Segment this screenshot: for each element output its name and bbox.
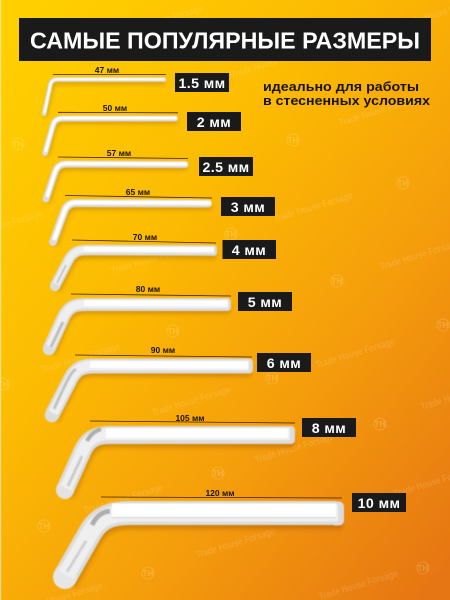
watermarks: Trade House Forsage <box>195 526 277 561</box>
dimension 65 mm: 65 мм <box>126 187 150 197</box>
watermarks: Trade House Forsage <box>230 46 312 81</box>
watermarks: TH <box>418 564 429 573</box>
dimension 47 mm: 47 мм <box>95 65 119 75</box>
watermarks: Trade House Forsage <box>83 482 165 517</box>
size label 10 mm: 10 мм <box>358 496 400 512</box>
dimension 90 mm: 90 мм <box>151 345 175 355</box>
hex key 8 mm <box>56 413 356 499</box>
dimension 80 mm: 80 мм <box>136 284 160 294</box>
size label 10 mm <box>352 493 406 512</box>
watermarks: TH <box>13 140 24 149</box>
size label 4 mm <box>222 240 276 259</box>
left edge highlight <box>0 0 1 600</box>
size label 4 mm: 4 мм <box>232 243 266 259</box>
hex key 6 mm <box>45 345 311 422</box>
watermarks: TH <box>213 469 224 478</box>
dimension 50 mm <box>58 103 178 113</box>
watermarks: TH <box>226 230 237 239</box>
key body <box>53 202 211 242</box>
watermarks: TH <box>375 420 386 429</box>
watermarks: Trade House Forsage <box>151 384 233 419</box>
size label 3 mm <box>221 197 275 216</box>
size label 2.5 mm: 2.5 мм <box>202 160 250 176</box>
watermarks: Trade House Forsage <box>110 242 192 277</box>
title banner: САМЫЕ ПОПУЛЯРНЫЕ РАЗМЕРЫ <box>30 28 420 54</box>
size label 8 mm: 8 мм <box>312 421 346 437</box>
dimension 50 mm: 50 мм <box>103 103 127 113</box>
watermarks: TH <box>39 522 50 531</box>
size label 6 mm: 6 мм <box>267 356 301 372</box>
watermarks: Trade House Forsage <box>40 341 122 376</box>
dimension 47 mm <box>53 65 166 75</box>
dimension 105 mm: 105 мм <box>175 413 205 423</box>
watermarks: Trade House Forsage <box>273 190 355 225</box>
hex key 4 mm <box>50 232 276 291</box>
key body <box>45 118 177 153</box>
size label 2 mm: 2 мм <box>197 115 231 131</box>
side note: в стесненных условиях <box>263 93 431 108</box>
watermarks: Trade House Forsage <box>315 336 397 371</box>
side note: идеально для работы <box>263 79 419 94</box>
key body <box>53 502 344 589</box>
watermarks: Trade House Forsage <box>254 431 336 466</box>
key body <box>56 426 295 499</box>
key body <box>44 79 165 114</box>
watermarks: Trade House Forsage <box>338 94 420 129</box>
watermarks: TH <box>398 179 409 188</box>
watermarks: TH <box>267 374 278 383</box>
dimension 57 mm <box>58 148 188 158</box>
dimension 120 mm: 120 мм <box>205 488 235 498</box>
size label 5 mm: 5 мм <box>248 295 282 311</box>
watermarks: TH <box>143 569 154 578</box>
watermarks: TH <box>332 277 343 286</box>
key body <box>45 358 253 422</box>
size label 2 mm <box>187 112 241 131</box>
key body <box>46 164 187 199</box>
size label 6 mm <box>257 353 311 372</box>
dimension 57 mm: 57 мм <box>107 148 131 158</box>
dimension 70 mm <box>72 232 216 243</box>
hex key 3 mm <box>53 187 275 245</box>
hex key 2 mm <box>45 103 241 156</box>
hex key 5 mm <box>43 284 292 355</box>
hex key 2.5 mm <box>46 148 253 202</box>
watermarks: TH <box>438 321 449 330</box>
dimension 70 mm: 70 мм <box>133 232 157 242</box>
side note <box>263 79 431 108</box>
hex key 1.5 mm <box>44 65 229 117</box>
title banner <box>19 18 431 61</box>
size label 8 mm <box>302 418 356 437</box>
watermarks: TH <box>288 136 299 145</box>
key body <box>50 245 217 291</box>
hex key 10 mm <box>53 488 406 589</box>
size label 3 mm: 3 мм <box>231 200 265 216</box>
key body <box>43 298 231 355</box>
size label 5 mm <box>238 292 292 311</box>
watermarks: TH <box>168 327 179 336</box>
size label 1.5 mm: 1.5 мм <box>178 76 226 92</box>
